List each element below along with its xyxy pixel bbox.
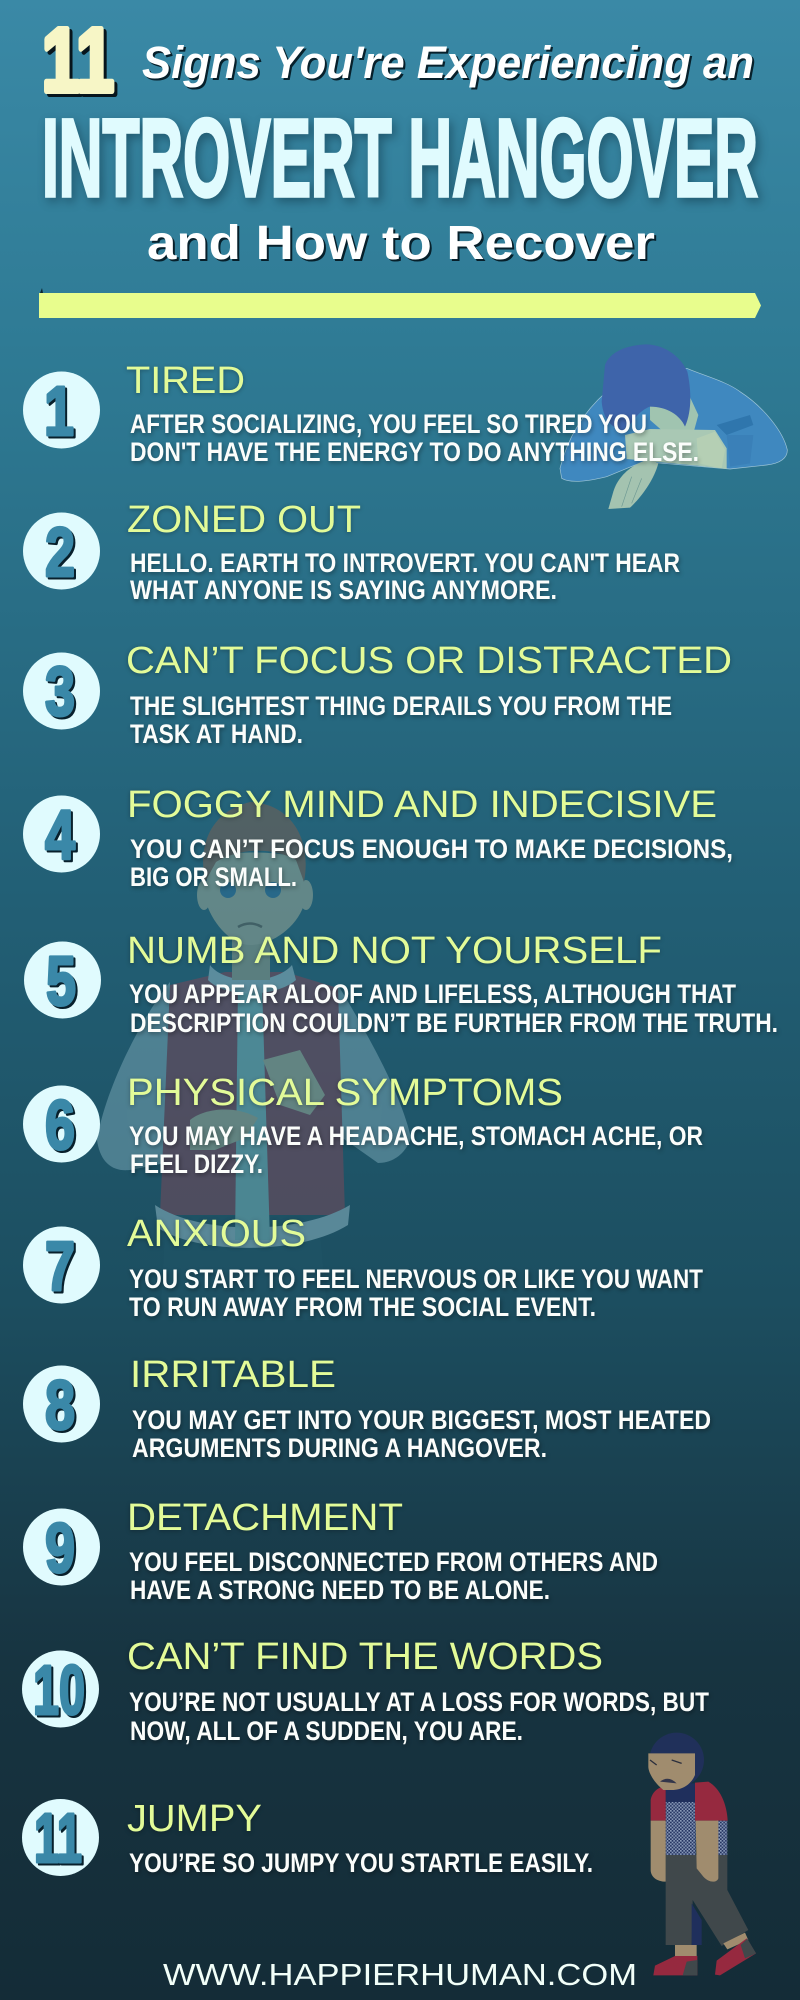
description 4: YOU CAN’T FOCUS ENOUGH TO MAKE DECISIONS, <box>130 834 733 864</box>
sign 1 <box>23 360 699 467</box>
description 2: WHAT ANYONE IS SAYING ANYMORE. <box>130 575 557 605</box>
vest <box>160 972 345 1215</box>
heading 4: FOGGY MIND AND INDECISIVE <box>127 784 717 826</box>
heading 3: CAN’T FOCUS OR DISTRACTED <box>126 640 732 682</box>
big number 11: 11 <box>42 11 114 111</box>
description 10 <box>129 1687 709 1746</box>
description 11: YOU’RE SO JUMPY YOU STARTLE EASILY. <box>129 1848 593 1878</box>
number badge 7 <box>23 1226 100 1305</box>
vest band <box>155 1205 350 1248</box>
illustration: worried young man, faded behind text <box>97 802 411 1320</box>
description 2 <box>130 548 680 605</box>
number badge 8 <box>23 1366 100 1444</box>
number badge 6: 6 <box>45 1086 75 1164</box>
description 9 <box>129 1547 658 1605</box>
divider arrow bar <box>39 288 761 318</box>
sign 3 <box>23 640 732 749</box>
number badge 3: 3 <box>45 652 75 730</box>
heading 9: DETACHMENT <box>127 1497 403 1539</box>
description 1: AFTER SOCIALIZING, YOU FEEL SO TIRED YOU <box>130 409 647 439</box>
description 8: ARGUMENTS DURING A HANGOVER. <box>132 1433 547 1463</box>
heading 2: ZONED OUT <box>127 499 361 541</box>
number badge 11: 11 <box>34 1799 82 1877</box>
number badge 10: 10 <box>33 1651 85 1729</box>
heading 8: IRRITABLE <box>130 1354 336 1396</box>
number badge 2 <box>23 512 100 591</box>
footer website: WWW.HAPPIERHUMAN.COM <box>163 1957 637 1992</box>
description 7: TO RUN AWAY FROM THE SOCIAL EVENT. <box>129 1292 596 1322</box>
description 7: YOU START TO FEEL NERVOUS OR LIKE YOU WANT <box>129 1264 703 1294</box>
description 4: BIG OR SMALL. <box>130 862 297 892</box>
heading 1: TIRED <box>126 360 245 402</box>
description 8 <box>132 1405 711 1463</box>
description 6: FEEL DIZZY. <box>130 1149 263 1179</box>
title line 1: Signs You're Experiencing an <box>142 37 754 88</box>
sign 8 <box>23 1354 711 1463</box>
number badge 1 <box>23 372 100 450</box>
sleeves <box>97 982 260 1180</box>
face <box>207 852 304 945</box>
neck and collar <box>208 965 296 994</box>
number badge 7: 7 <box>45 1227 75 1305</box>
sign 11 <box>22 1798 593 1878</box>
eyes <box>220 882 236 898</box>
description 10: NOW, ALL OF A SUDDEN, YOU ARE. <box>130 1716 523 1746</box>
description 1: DON'T HAVE THE ENERGY TO DO ANYTHING ELSE. <box>130 437 699 467</box>
number badge 9: 9 <box>45 1509 75 1587</box>
sign 6 <box>23 1072 703 1179</box>
number badge 1: 1 <box>44 372 74 450</box>
description 5 <box>129 979 778 1038</box>
sign 4 <box>23 784 733 892</box>
description 3 <box>130 691 672 749</box>
description 9: YOU FEEL DISCONNECTED FROM OTHERS AND <box>129 1547 658 1577</box>
description 8: YOU MAY GET INTO YOUR BIGGEST, MOST HEATED <box>132 1405 711 1435</box>
description 1 <box>130 409 699 467</box>
heading 11: JUMPY <box>127 1798 262 1840</box>
description 6 <box>129 1121 703 1179</box>
hair <box>203 802 306 882</box>
title line 3: and How to Recover <box>147 217 655 270</box>
illustration: tired man resting on arm <box>560 344 787 509</box>
number badge 5: 5 <box>46 942 76 1020</box>
sign 10 <box>22 1636 709 1746</box>
heading 7: ANXIOUS <box>127 1213 306 1255</box>
heading 10: CAN’T FIND THE WORDS <box>127 1636 603 1678</box>
description 3: TASK AT HAND. <box>130 719 303 749</box>
description 2: HELLO. EARTH TO INTROVERT. YOU CAN'T HEAR <box>130 548 680 578</box>
description 9: HAVE A STRONG NEED TO BE ALONE. <box>130 1575 550 1605</box>
number badge 9 <box>23 1508 100 1587</box>
number badge 6 <box>23 1086 100 1164</box>
number badge 8: 8 <box>45 1366 75 1444</box>
description 4 <box>130 834 733 892</box>
mouth <box>238 924 262 927</box>
number badge 4: 4 <box>45 796 75 874</box>
number badge 2: 2 <box>45 513 75 591</box>
description 7 <box>129 1264 703 1322</box>
sign 2 <box>23 499 680 605</box>
number badge 5 <box>24 942 101 1020</box>
title block <box>42 11 758 270</box>
sign 7 <box>23 1213 703 1322</box>
sign 5 <box>24 930 778 1038</box>
description 6: YOU MAY HAVE A HEADACHE, STOMACH ACHE, OR <box>129 1121 703 1151</box>
ears <box>197 880 211 910</box>
heading 6: PHYSICAL SYMPTOMS <box>127 1072 563 1114</box>
sign 9 <box>23 1497 658 1605</box>
illustration: sad man walking <box>648 1733 756 1975</box>
trousers <box>160 1235 328 1320</box>
number badge 3 <box>23 652 100 730</box>
description 3: THE SLIGHTEST THING DERAILS YOU FROM THE <box>130 691 672 721</box>
shirt strip <box>235 985 270 1240</box>
hands <box>190 1110 258 1150</box>
number badge 4 <box>23 796 100 874</box>
heading 5: NUMB AND NOT YOURSELF <box>127 930 662 972</box>
